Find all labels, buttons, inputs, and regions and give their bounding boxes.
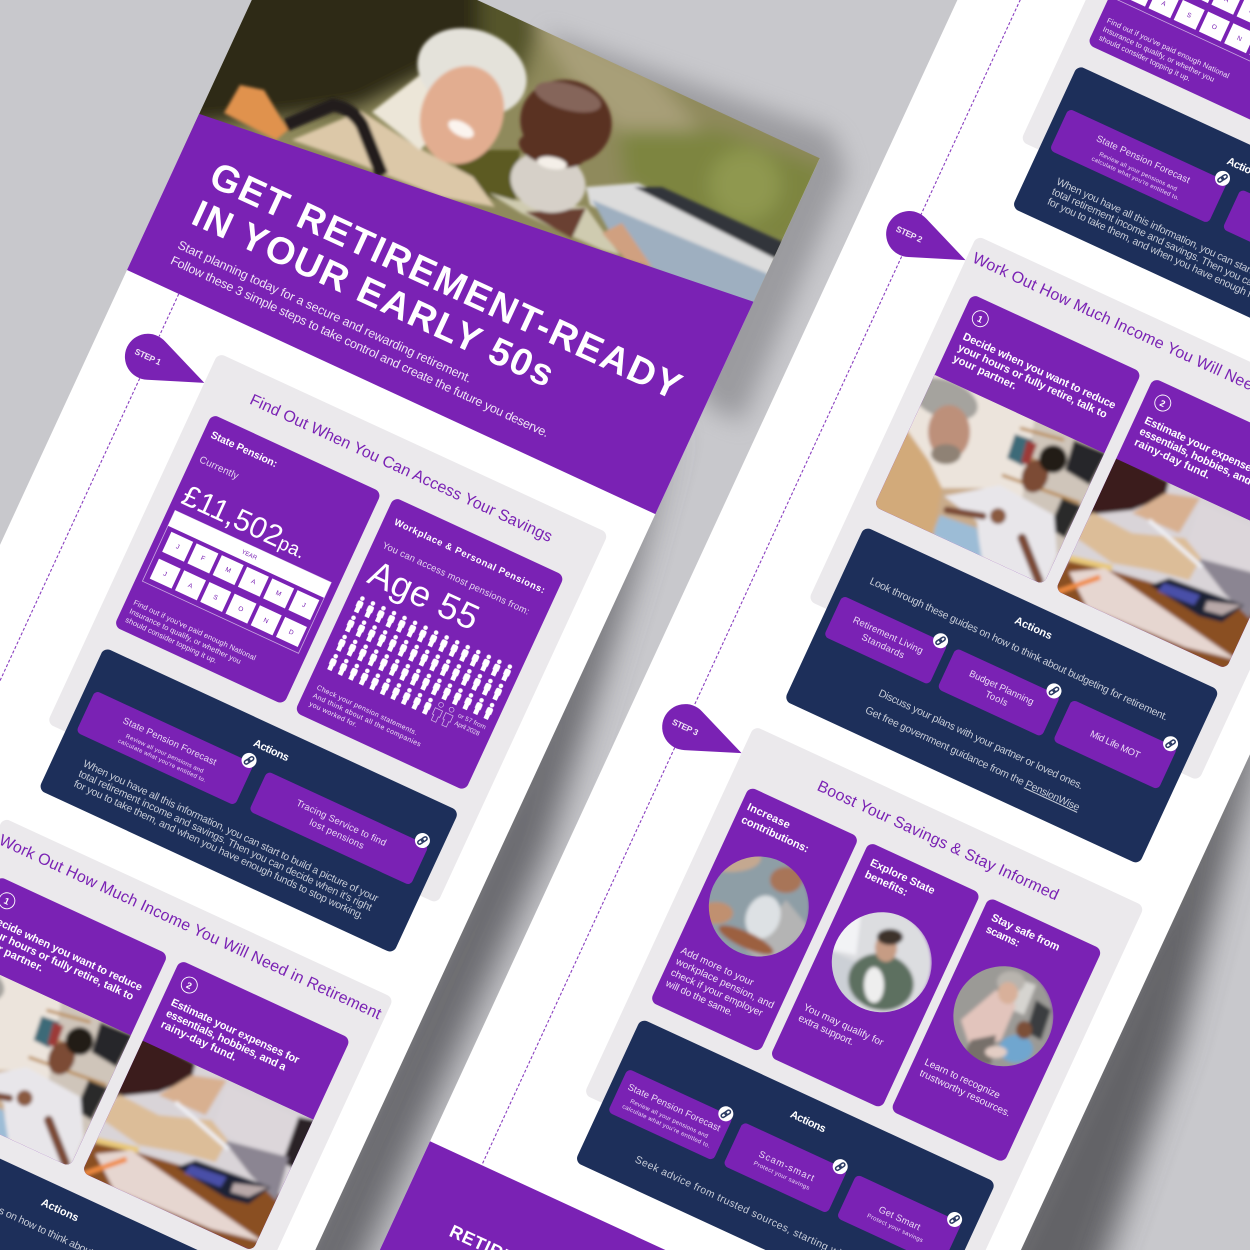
step 1 heading: Find Out When You Can Access Your Savings (247, 392, 555, 546)
calendar (1116, 0, 1250, 71)
photo: handshake with adviser (953, 966, 1054, 1066)
calendar: M (274, 590, 282, 598)
step 3 tag (655, 697, 751, 774)
card: workplace and personal pensions: you worked for. (308, 701, 358, 729)
button: state pension forecast: Review all your pensions and (124, 734, 204, 775)
card: stay safe from scams: scams: (984, 924, 1022, 950)
button: state pension forecast (76, 683, 259, 806)
card: decide when to retire: Decide when you want to reduce (961, 331, 1118, 412)
button: tracing service: lost pensions (307, 817, 366, 852)
card: workplace and personal pensions: Check your pension statements. (315, 684, 418, 737)
actions panel: step 1 (1012, 65, 1250, 372)
step 2 heading: Work Out How Much Income You Will Need in Retirement (0, 832, 384, 1023)
button: scam-smart (723, 1115, 851, 1214)
calendar: F (199, 555, 206, 563)
button: state pension forecast: calculate what you're entitled to. (1090, 156, 1180, 202)
button: budget planning tools: Budget Planning (967, 668, 1035, 708)
calendar: J (301, 602, 307, 609)
step 2 tag: STEP 2 (894, 224, 924, 245)
people icons (323, 593, 516, 743)
photo: coins in jar (708, 856, 809, 956)
actions panel: step 2: Actions (1013, 615, 1054, 642)
calendar: S (212, 594, 219, 602)
strip shadow: left sheet (6, 414, 750, 1250)
calendar: N (1236, 35, 1243, 43)
card: workplace and personal pensions: April 2028 (453, 720, 481, 738)
card: decide when to retire (876, 296, 1140, 582)
button: state pension forecast: State Pension Forecast (121, 715, 218, 768)
calendar: O (237, 605, 244, 614)
card: state pension: should consider topping it up. (1097, 33, 1192, 83)
card: explore state benefits: Explore State (868, 857, 937, 897)
calendar: J (175, 543, 180, 551)
card: estimate expenses: 2 (185, 980, 193, 991)
photo: couple talking (876, 374, 1104, 582)
step 2 tag (0, 786, 2, 863)
card: state pension: Currently (197, 454, 240, 482)
actions panel: step 1 (38, 647, 459, 954)
button: budget planning tools: Tools (983, 689, 1010, 709)
step 1 tag: STEP 1 (133, 346, 163, 367)
card: increase contributions: will do the same. (663, 978, 735, 1019)
timeline dashes (0, 294, 179, 1250)
button: state pension forecast (608, 1062, 736, 1161)
photo: calculator and receipts (84, 1040, 314, 1249)
card: increase contributions: Increase (745, 801, 792, 831)
card: estimate expenses: rainy-day fund. (159, 1019, 238, 1064)
photo background (178, 0, 820, 318)
panel: step 1 (47, 353, 608, 904)
subtitle: Follow these 3 simple steps to take control and create the future you deserve. (168, 253, 551, 440)
card: estimate expenses (84, 962, 348, 1249)
card: state pension: Insurance to qualify, or whether you (1101, 24, 1216, 84)
actions panel: step 2 (784, 526, 1219, 865)
button: tracing service (249, 762, 433, 886)
step 2 tag (879, 204, 975, 281)
button: state pension forecast: Review all your pensions and (1098, 152, 1178, 193)
button: get smart: Get Smart (877, 1204, 922, 1233)
card: decide when to retire: 1 (976, 314, 984, 325)
subtitle: Start planning today for a secure and rewarding retirement. (176, 238, 474, 386)
left infographic sheet (0, 0, 820, 1250)
timeline dashes (482, 0, 1154, 1165)
card: estimate expenses: 2 (1158, 398, 1167, 409)
card: workplace and personal pensions: Workplace & Personal Pensions: (392, 517, 547, 596)
calendar: N (262, 617, 270, 625)
actions panel: step 2: Discuss your plans with your partner or loved ones. (877, 687, 1085, 792)
actions panel: step 2: Get free government guidance from the PensionWise (863, 704, 1082, 814)
card: state pension: should consider topping it up. (124, 615, 219, 665)
button: state pension forecast (1049, 101, 1232, 224)
calendar: S (1185, 12, 1193, 20)
card: state pension: Find out if you've paid enough National (1105, 16, 1231, 80)
button: retirement living standards: Standards (860, 632, 906, 661)
card: decide when to retire: your hours or fully retire, talk to (956, 342, 1109, 421)
card: explore state benefits: benefits: (863, 869, 909, 899)
card: state pension (114, 414, 382, 705)
card: estimate expenses: Estimate your expenses for (169, 997, 302, 1067)
calendar: O (1210, 23, 1218, 32)
card: estimate expenses: rainy-day fund. (1132, 436, 1212, 482)
calendar: D (287, 629, 295, 637)
header band (127, 58, 753, 514)
button: tracing service: Tracing Service to find (294, 798, 388, 849)
button: state pension forecast: calculate what you're entitled to. (117, 738, 207, 784)
button: mid life mot: Mid Life MOT (1088, 729, 1142, 761)
hero photo: retired couple outdoors (178, 0, 820, 318)
card: state pension: pa. (275, 533, 308, 563)
card: state pension: State Pension: (209, 429, 279, 470)
button: state pension forecast: calculate what you're entitled to. (621, 1104, 711, 1150)
actions panel: step 1: total retirement income and savings. Then you can decide when it's right (76, 768, 374, 914)
button: retirement living standards: Retirement Living (851, 615, 925, 657)
card: explore state benefits (772, 844, 978, 1106)
button: mid life mot (1053, 692, 1181, 790)
photo: man at laptop (832, 912, 932, 1012)
calendar: A (187, 582, 194, 590)
card: increase contributions: check if your employer (669, 967, 765, 1020)
calendar: A (1160, 0, 1168, 8)
card: stay safe from scams: Learn to recognize (923, 1057, 1002, 1102)
panel: step 2 (0, 820, 392, 1250)
card: workplace and personal pensions (295, 497, 565, 791)
card: stay safe from scams: Stay safe from (989, 912, 1062, 954)
card: stay safe from scams (892, 900, 1100, 1161)
card: increase contributions (652, 788, 857, 1050)
steps 1 and 2 content (786, 0, 1250, 862)
panel: step 2 (810, 238, 1250, 778)
right infographic sheet (380, 0, 1250, 1250)
card: state pension: Find out if you've paid enough National (132, 598, 258, 662)
card: increase contributions: Add more to your (679, 946, 756, 989)
panel: step 1 (1020, 0, 1250, 322)
card: state pension: Insurance to qualify, or whether you (128, 607, 243, 666)
card: increase contributions: workplace pension, and (673, 956, 776, 1011)
card: state pension: £11,502 (177, 479, 288, 554)
button: budget planning tools (937, 639, 1064, 737)
calendar: YEAR (240, 549, 258, 562)
card: estimate expenses: essentials, hobbies, and a (164, 1008, 289, 1074)
card: explore state benefits: You may qualify for (801, 1002, 886, 1049)
actions panel: step 2: Look through these guides on how to think about budgeting for retirement. (868, 575, 1170, 723)
strip shadow: left sheet top edge (432, 6, 868, 422)
card: workplace and personal pensions: And think about all the companies (312, 693, 422, 749)
card: workplace and personal pensions: You can access most pensions from: (380, 540, 531, 618)
button: retirement living standards (824, 589, 951, 685)
button: get smart: Protect your savings (866, 1213, 924, 1244)
main title: GET RETIREMENT-READY (203, 155, 688, 409)
card: workplace and personal pensions: Age 55 (362, 552, 486, 638)
button: state pension forecast: State Pension Forecast (626, 1082, 722, 1134)
card: increase contributions: contributions: (739, 814, 811, 855)
actions panel: step 3: Actions (788, 1109, 828, 1135)
calendar: M (224, 566, 232, 575)
steps 1 and 2 content (0, 317, 653, 1250)
button: get smart (836, 1167, 965, 1250)
actions panel: step 1: When you have all this information, you can start to build a picture of your (81, 758, 381, 905)
button: state pension forecast: Review all your pensions and (629, 1099, 709, 1140)
main title: IN YOUR EARLY 50s (186, 193, 560, 396)
card: decide when to retire: your partner. (951, 353, 1018, 392)
actions panel: step 2: Actions (39, 1197, 80, 1224)
card: decide when to retire: 1 (2, 896, 11, 907)
card: stay safe from scams: trustworthy resources. (918, 1068, 1012, 1119)
calendar (142, 510, 331, 653)
button: scam-smart: Scam-smart (757, 1149, 816, 1184)
actions panel: step 2 (0, 1108, 246, 1250)
panel: step 3 (583, 725, 1144, 1250)
card: decide when to retire (0, 878, 166, 1164)
actions panel: step 3 (575, 1018, 996, 1250)
photo: calculator and receipts (1058, 458, 1250, 667)
step 3 tag: STEP 3 (670, 717, 700, 738)
button: tracing service (1222, 189, 1250, 304)
photo: couple talking (0, 974, 131, 1164)
calendar: J (162, 571, 168, 578)
actions panel: step 1: Actions (251, 737, 291, 764)
card: explore state benefits: extra support. (796, 1013, 855, 1048)
strip shadow: right sheet (688, 467, 1250, 1250)
card: workplace and personal pensions: or 57 from (457, 712, 487, 731)
step 3 heading: Boost Your Savings & Stay Informed (814, 778, 1061, 904)
card: estimate expenses (1058, 380, 1250, 667)
actions panel: step 1: for you to take them, and when you have enough funds to stop working. (72, 778, 366, 922)
step 1 tag (117, 326, 214, 404)
button: scam-smart: Protect your savings (752, 1161, 810, 1192)
calendar: A (250, 578, 257, 587)
card: state pension (1087, 0, 1250, 123)
button: state pension forecast: State Pension Forecast (1094, 133, 1192, 186)
